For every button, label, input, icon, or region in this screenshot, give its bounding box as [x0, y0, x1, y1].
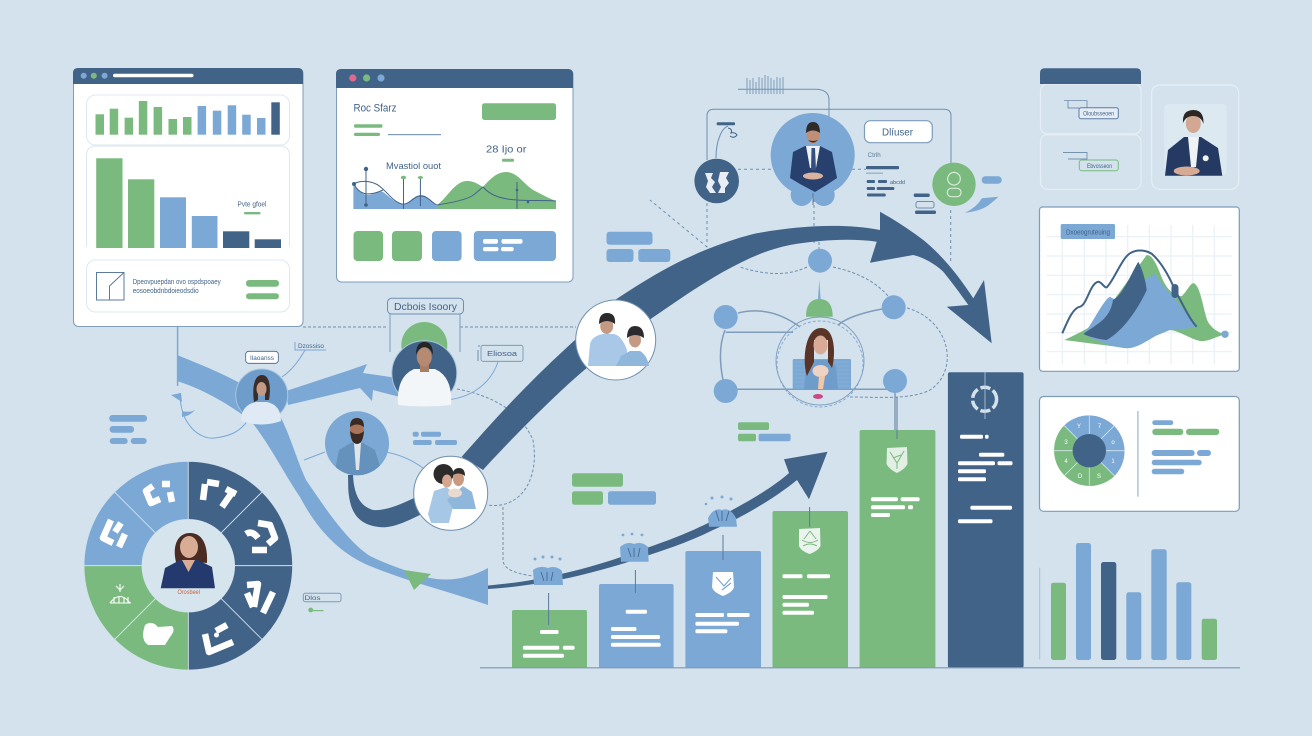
panel: line chart window [336, 69, 573, 282]
arrow: light blue ribbon to lower funnel [177, 355, 488, 605]
pills: notes left of donut [109, 415, 147, 444]
ring chart: 4 [1064, 459, 1068, 465]
label: small tag by wheel [303, 593, 341, 612]
centre disc [142, 519, 235, 612]
arrow: green tip on ribbon [404, 570, 431, 590]
top profile cluster [694, 75, 1002, 214]
man portrait [1165, 110, 1222, 176]
panel: portrait card [1152, 85, 1239, 189]
chart tag: Dxoeogruteuing [1066, 228, 1110, 236]
light blue segments [84, 492, 156, 566]
baseline [480, 667, 1240, 668]
bar four [772, 511, 848, 668]
waveform icon [747, 75, 783, 94]
bar five [860, 430, 935, 668]
bar connector lines [549, 397, 897, 625]
label: callout right: Eliosoa [487, 351, 517, 358]
area chart [352, 167, 556, 209]
chart title: Roc Sfarz [354, 103, 396, 115]
pills: blue notes near arrow [606, 232, 670, 262]
ring chart: o [1111, 440, 1115, 446]
green user badge [932, 163, 976, 206]
arrow: navy ribbon from person to person [348, 475, 420, 527]
ring chart: D [1078, 474, 1083, 480]
large bar chart card [86, 146, 290, 248]
pills: green and blue notes [572, 473, 656, 505]
panel: ring chart card [1040, 396, 1239, 511]
person: man in blue jacket [325, 411, 389, 476]
profile details: Ctrlh [868, 153, 881, 159]
profile: heading shield and man in white shirt: Dcbois Isoory [394, 301, 458, 313]
bar chart: right small [1039, 543, 1217, 660]
arrow: rising growth arrow [488, 452, 828, 589]
chart subtitle: Mvastiol ouot [386, 161, 441, 172]
bar two [599, 584, 674, 668]
heading label [388, 298, 464, 314]
person: two people embracing [414, 456, 488, 530]
chart annotation: 28 Ijo or [486, 145, 527, 156]
legend pills [1152, 420, 1219, 474]
ring chart: 7 [1098, 424, 1102, 430]
label: person one: Ilaoanss [250, 355, 275, 362]
icon: small flag [171, 393, 195, 417]
ring chart: S [1097, 474, 1101, 480]
network: central node cluster [714, 249, 907, 407]
pills: green and blue notes upper [738, 422, 791, 441]
description card [86, 260, 290, 312]
label: callout top: Dzossiso [298, 344, 325, 350]
arrow: main navy sweeping arrow [462, 212, 992, 470]
ring chart [1054, 415, 1125, 486]
small speech bubble notes [914, 194, 936, 214]
arrow: light blue arrow to person [286, 364, 400, 405]
name label [864, 121, 932, 143]
woman at desk [776, 280, 864, 407]
label: callout right [478, 345, 523, 361]
ring chart: 1 [1111, 459, 1115, 465]
woman in navy blazer [161, 533, 215, 588]
bar one [512, 610, 587, 668]
bar three [685, 551, 761, 668]
badge caption [717, 122, 737, 137]
chart: growth staircase [480, 372, 1240, 668]
bar six [948, 372, 1024, 668]
stat tiles [354, 231, 556, 261]
person: circle with woman in light shirt [236, 369, 288, 424]
man in navy suit [771, 113, 855, 206]
blue pill and crescent [965, 176, 1002, 213]
icon: crowd marker two [620, 533, 649, 562]
profile: heading shield and man in white shirt [388, 298, 464, 406]
person: two young men [576, 300, 656, 380]
label: small tag by wheel: Dlos [304, 595, 321, 602]
green segments [115, 598, 188, 670]
icon: crowd marker three [705, 496, 737, 527]
panel: bar chart window [73, 68, 303, 326]
navy segments [188, 461, 262, 533]
description card: Dpeovpuepdan ovo ospdspoaey [133, 279, 221, 286]
label: person one [246, 351, 278, 363]
panel: flow labels card [1040, 68, 1141, 189]
panel: mountain chart card [1040, 207, 1239, 371]
chart tag [1061, 224, 1115, 239]
large bar chart card: Pvte gfoel [238, 200, 267, 209]
icon: crowd marker one [533, 556, 563, 585]
segment icons [103, 482, 275, 652]
name label: Dlíuser [882, 128, 914, 138]
mountain area chart [1062, 251, 1229, 348]
ring chart: Y [1077, 424, 1081, 430]
window header [73, 68, 303, 84]
navy badge [694, 159, 739, 203]
description card: eosoeobdnbdoieodsdio [133, 288, 199, 295]
profile details [866, 153, 905, 196]
flow label blue: Oloubsseoen [1083, 112, 1114, 118]
small bar chart card [86, 95, 290, 145]
ring chart: 3 [1064, 440, 1068, 446]
window header [336, 69, 573, 88]
donut: main segmented wheel [84, 461, 293, 670]
pills: blue notes centre [413, 432, 457, 445]
flow label green: Ebvosseon [1087, 164, 1112, 170]
connector lines and dashed links [178, 89, 951, 576]
profile details: abcdd [890, 180, 905, 186]
centre caption: Orosbeel [178, 590, 200, 596]
card header [1040, 68, 1141, 84]
label: callout top [295, 342, 326, 350]
